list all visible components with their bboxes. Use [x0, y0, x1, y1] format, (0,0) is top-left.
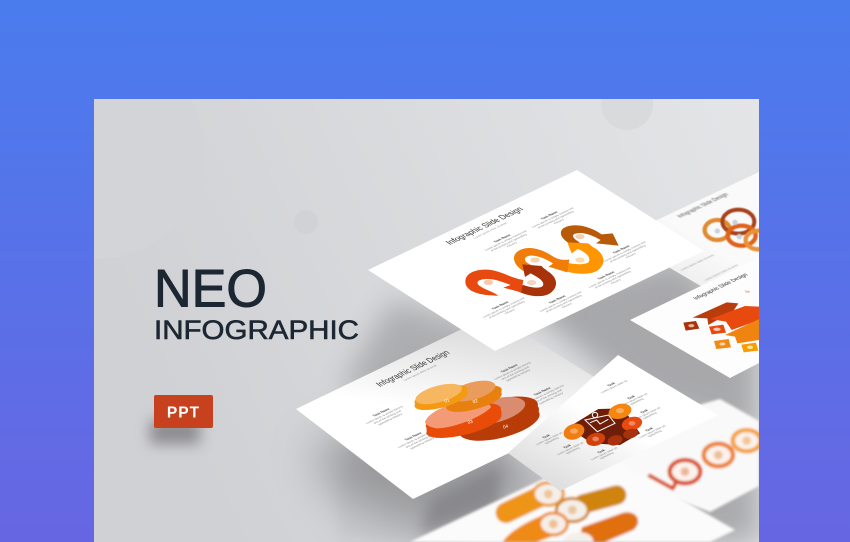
text: task blocks: typesetting: [564, 446, 581, 455]
text: task blocks: [536, 380, 666, 460]
text: task blocks: of the printing and typesetting: [544, 294, 583, 313]
title: NEO: NEO: [154, 260, 267, 318]
text: task blocks: typesetting industry: [538, 391, 565, 405]
text: task blocks: Lorem ipsum is simply dummy text: [587, 267, 632, 289]
disc 04: 04: [502, 423, 509, 430]
slide: hexagon petals: [508, 355, 718, 491]
text: task blocks: typesetting industry: [505, 368, 532, 382]
text: task blocks: of the printing and typesetting: [536, 210, 575, 229]
arrow: amber: [552, 242, 603, 274]
heading: slide title: Lorem ipsum dolor sit amet: [402, 364, 438, 382]
text: task blocks: of the printing and typesetting: [593, 270, 632, 289]
arrow: brown: [561, 225, 619, 246]
slide: arrows staircase (right): [630, 274, 759, 378]
text: task blocks: typesetting industry: [409, 436, 436, 450]
slide: interlocking rings (top right): Lorem ipsum dolor sit amet: [679, 254, 715, 271]
text: task blocks: of the printing and typesetting: [489, 233, 528, 252]
text: task blocks: industry: [505, 241, 518, 248]
text: task blocks: Lorem ipsum is simply dummy text: [538, 291, 583, 313]
text: task blocks: text of the printing and: [500, 365, 530, 381]
text: task blocks: Lorem ipsum is simply dummy: [493, 361, 533, 381]
text: task blocks: Lorem ipsum is simply dummy: [397, 429, 437, 449]
disc 03: 03: [467, 419, 474, 425]
text: task blocks: Lorem ipsum is simply dummy text: [483, 230, 528, 252]
text: task blocks: Lorem ipsum dolor sit: [638, 424, 667, 439]
disc 01: 01: [444, 397, 450, 404]
text: task blocks: Task Name: [500, 363, 519, 373]
text: task blocks: Task Name: [548, 295, 567, 304]
text: task blocks: of the printing and typesetting: [487, 300, 526, 319]
text: task blocks: Task Name: [372, 407, 391, 417]
badge: PPT: PPT: [167, 404, 200, 422]
text: task blocks: industry: [552, 218, 565, 225]
disc 02: 02: [472, 398, 479, 404]
slide: arrows staircase (right): Infographic Slide Design: [692, 272, 750, 301]
slide: interlocking rings (top right): Infographic Slide Design: [677, 193, 730, 219]
text: task blocks: Task: [626, 395, 636, 400]
heading: slide title: Infographic Slide Design: [374, 349, 452, 388]
text: task blocks: Task: [644, 427, 654, 432]
chart: four stacked discs: [414, 380, 540, 441]
text: task blocks: typesetting: [641, 411, 658, 420]
text: task blocks: Task Name: [404, 431, 423, 441]
text: task blocks: of the printing and typesetting: [608, 244, 647, 263]
slide: interlocking rings (top right): Lorem ipsum dolor sit amet: [703, 264, 739, 281]
text: task blocks: Task: [606, 382, 616, 387]
heading: slide title: Lorem ipsum dolor sit amet: [472, 222, 508, 239]
panel: grey slide showcase: [94, 99, 759, 542]
text: task blocks: [366, 362, 564, 450]
text: task blocks: Lorem ipsum dolor sit: [600, 379, 629, 394]
text: task blocks: Lorem ipsum dolor sit: [620, 392, 649, 407]
badge: PPT: [154, 395, 213, 428]
text: task blocks: industry: [560, 302, 573, 309]
text: task blocks: Task Name: [491, 301, 510, 310]
text: task blocks: typesetting: [646, 429, 663, 438]
heading: slide title: Infographic Slide Design: [443, 205, 525, 246]
slide: stacked discs: [296, 330, 594, 499]
text: task blocks: Task: [541, 434, 551, 439]
slide: wavy ribbon (blurred, bottom right): [618, 398, 759, 513]
slide: pill timeline (blurred, bottom centre): [411, 470, 735, 542]
chart: petal diagram: [564, 404, 642, 446]
text: task blocks: text of the printing and: [533, 388, 563, 404]
text: task blocks: Lorem ipsum dolor sit: [590, 446, 619, 461]
text: task blocks: Task: [639, 409, 649, 414]
heading: slide title: [376, 351, 450, 387]
text: task blocks: typesetting industry: [377, 412, 404, 426]
text: task blocks: Lorem ipsum is simply dummy: [526, 384, 566, 404]
text: task blocks: Task Name: [540, 211, 559, 220]
title: INFOGRAPHIC: INFOGRAPHIC: [154, 315, 359, 345]
text: task blocks: text of the printing and: [404, 433, 434, 449]
text: task blocks: typesetting: [598, 451, 615, 460]
text: task blocks: typesetting: [628, 397, 645, 406]
text: task blocks: typesetting: [543, 436, 560, 445]
chart: serpentine arrows: [465, 225, 619, 296]
text: task blocks: Task: [562, 444, 572, 449]
text: task blocks: Lorem ipsum dolor sit: [556, 441, 585, 456]
text: task blocks: Lorem ipsum is simply dummy: [365, 405, 405, 425]
text: task blocks: Lorem ipsum dolor sit: [633, 406, 662, 421]
arrow: dark red: [513, 264, 556, 296]
badge shadow: [150, 420, 200, 444]
text: task blocks: Lorem ipsum is simply dummy text: [481, 297, 526, 319]
text: task blocks: Task Name: [612, 245, 631, 254]
text: task blocks: industry: [609, 278, 622, 285]
slide: arrows staircase (right): Task: [745, 291, 751, 293]
icon: chart emblem: [585, 412, 615, 432]
text: task blocks: Task Name: [597, 271, 616, 280]
text: task blocks: Task Name: [533, 386, 552, 396]
slide: interlocking rings (top right): [656, 172, 759, 286]
heading: slide title: [446, 208, 524, 245]
text: task blocks: industry: [503, 308, 516, 315]
arrow: orange: [514, 248, 569, 272]
text: task blocks: Task: [596, 449, 606, 454]
text: task blocks: Task Name: [493, 234, 512, 243]
text: task blocks: industry: [624, 252, 637, 259]
text: task blocks: [482, 207, 646, 318]
arrow: red-orange: [465, 270, 523, 296]
text: task blocks: Lorem ipsum dolor sit: [535, 431, 564, 446]
text: task blocks: Lorem ipsum is simply dummy text: [602, 241, 647, 263]
text: task blocks: Lorem ipsum is simply dummy text: [530, 207, 575, 229]
slide: serpentine arrows (main): [368, 170, 704, 351]
text: task blocks: text of the printing and: [372, 409, 402, 425]
